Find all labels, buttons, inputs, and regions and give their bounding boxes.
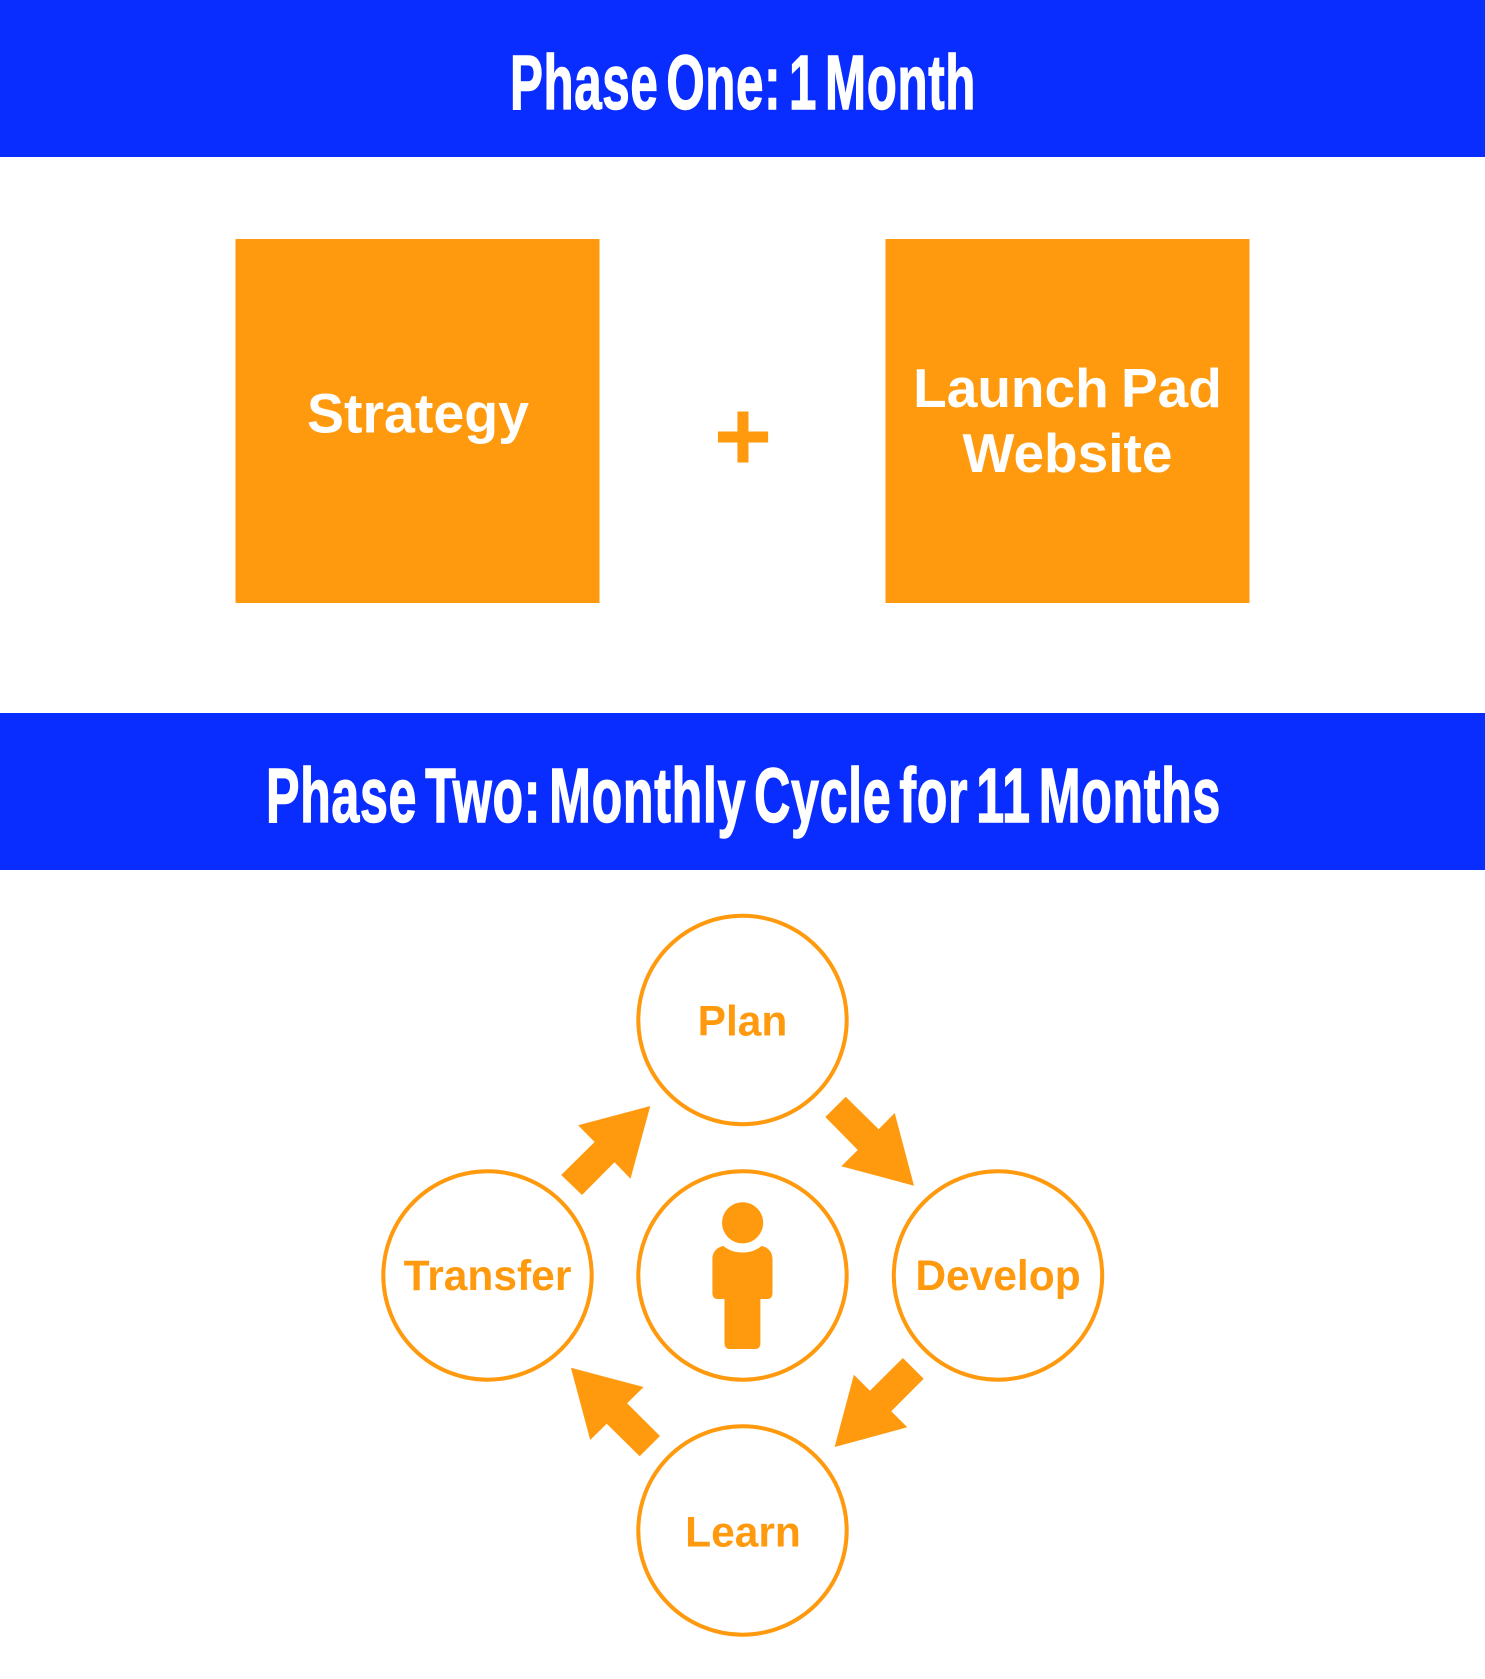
circle: develop: Develop [915, 1253, 1081, 1300]
panel: strategy [236, 239, 600, 603]
plus sign: + [714, 380, 772, 492]
circle: plan [638, 916, 847, 1124]
circle: person at center [638, 1171, 847, 1380]
panel: launch pad website: Website [963, 422, 1172, 484]
arrow: transfer to plan [561, 1106, 650, 1195]
circle: develop [894, 1171, 1102, 1380]
banner: phase one [0, 0, 1485, 157]
circle: transfer: Transfer [404, 1253, 571, 1300]
banner: phase two [0, 713, 1485, 870]
panel: launch pad website [886, 239, 1250, 603]
panel: launch pad website: Launch Pad [913, 357, 1222, 419]
arrow: develop to learn [835, 1358, 924, 1447]
circle: learn: Learn [685, 1510, 801, 1556]
arrow: learn to transfer [571, 1368, 660, 1456]
circle: transfer [383, 1171, 592, 1380]
heading: phase one: Phase One: 1 Month [510, 40, 976, 126]
arrow: plan to develop [825, 1097, 914, 1186]
circle: plan: Plan [698, 998, 787, 1046]
icon: person [712, 1202, 772, 1349]
circle: learn [638, 1426, 847, 1635]
panel: strategy: Strategy [307, 382, 529, 444]
